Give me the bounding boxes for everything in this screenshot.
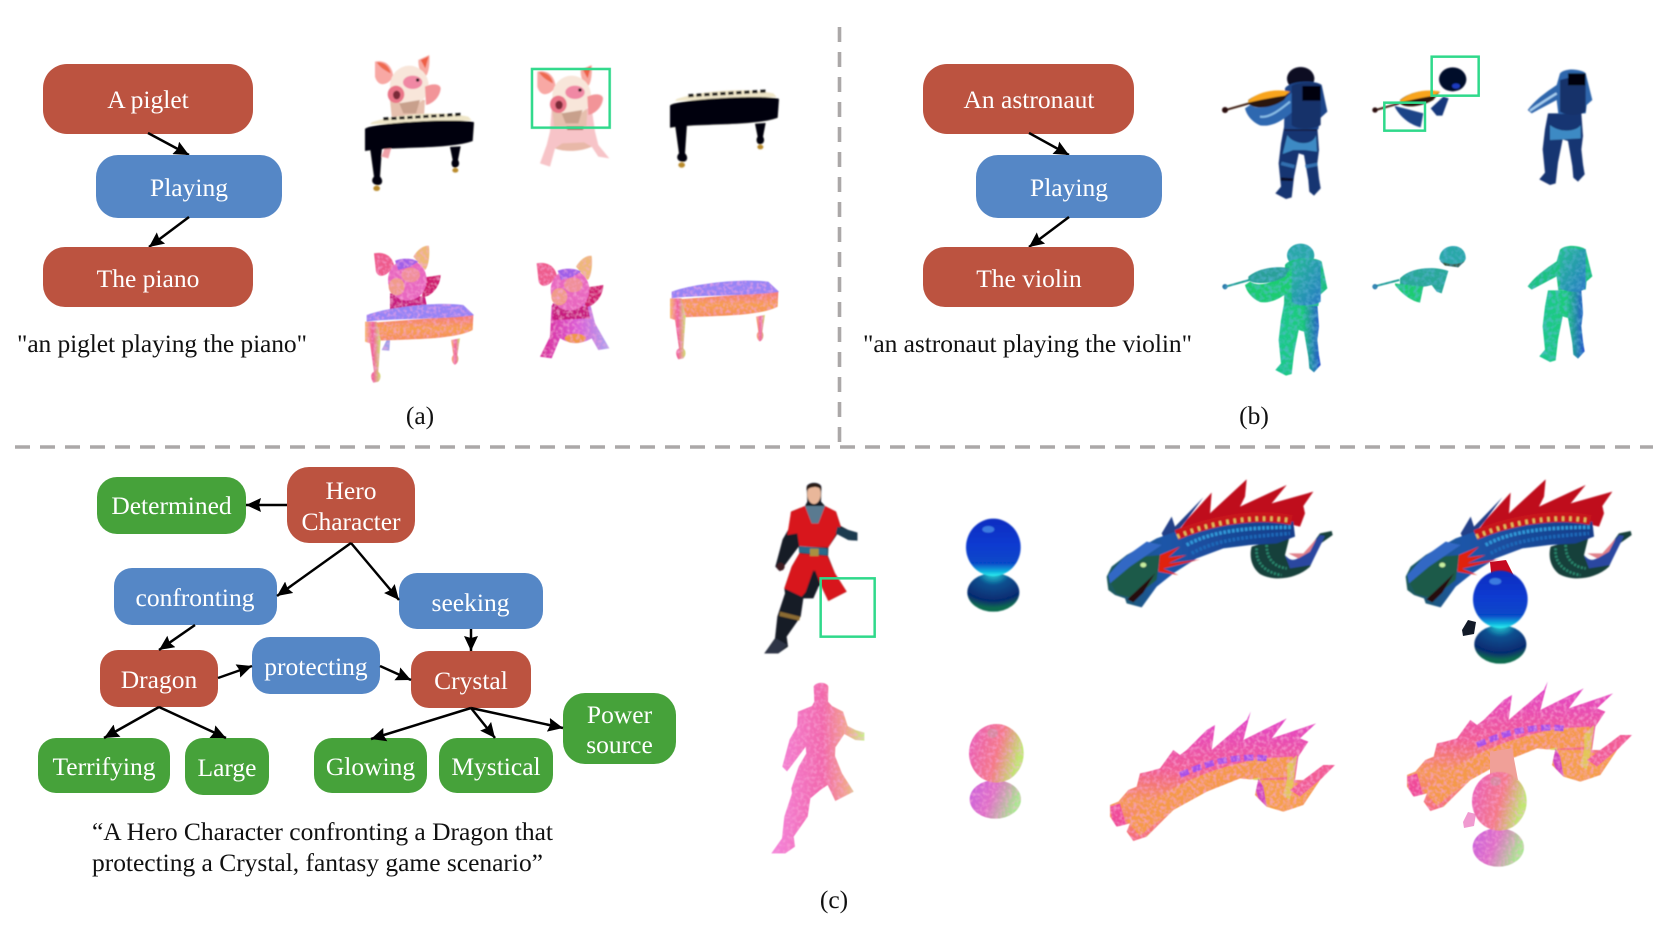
horizontal divider xyxy=(15,445,1653,449)
arrow: playing to piano xyxy=(149,217,189,247)
prompt text (c): protecting a Crystal, fantasy game scenario” xyxy=(92,848,543,877)
node: The piano xyxy=(43,247,253,307)
node: Power source: source xyxy=(586,730,653,759)
node: The violin xyxy=(923,247,1134,307)
node: An astronaut: An astronaut xyxy=(963,85,1095,114)
node: Large: Large xyxy=(198,753,256,782)
arrow: playing to violin xyxy=(1029,217,1069,247)
prompt text (c) xyxy=(92,817,553,877)
highlight box: hero coat xyxy=(821,578,875,637)
arrow: piglet to playing xyxy=(148,133,189,155)
highlight box: violin arm xyxy=(1384,103,1425,131)
node: Power source xyxy=(563,693,676,764)
node: Glowing xyxy=(314,738,427,793)
node: Hero Character: Hero xyxy=(326,476,376,505)
highlight box: helmet xyxy=(1432,57,1479,96)
node: confronting: confronting xyxy=(136,583,255,612)
caption (a): (a) xyxy=(406,401,434,430)
node: Playing xyxy=(96,155,282,218)
prompt text (a): "an piglet playing the piano" xyxy=(17,329,307,358)
render: crystal normal xyxy=(969,724,1024,819)
render: dragon normal xyxy=(1110,712,1335,841)
node: Determined xyxy=(97,477,246,534)
node: A piglet: A piglet xyxy=(107,85,189,114)
node: A piglet xyxy=(43,64,253,134)
render: combined dragon and crystal normal xyxy=(1407,682,1632,867)
render row: piglet and piano normals xyxy=(365,246,779,383)
render: dragon RGB xyxy=(1107,479,1333,607)
render: crystal RGB xyxy=(966,519,1021,612)
render: combined dragon and crystal RGB xyxy=(1406,479,1632,664)
render row: astronaut RGB xyxy=(1222,57,1592,199)
node: Glowing: Glowing xyxy=(326,752,415,781)
node: Terrifying: Terrifying xyxy=(52,752,156,781)
node: protecting xyxy=(252,637,380,694)
node: An astronaut xyxy=(923,64,1134,134)
panel (a): piglet scene xyxy=(17,55,779,430)
node: Crystal: Crystal xyxy=(434,666,508,695)
node: The violin: The violin xyxy=(976,264,1082,293)
node: Determined: Determined xyxy=(111,491,232,520)
node: confronting xyxy=(114,568,277,625)
node: Dragon: Dragon xyxy=(121,665,197,694)
panel (b): astronaut scene xyxy=(863,57,1592,430)
node: seeking: seeking xyxy=(432,588,510,617)
node: Terrifying xyxy=(38,738,170,793)
node: Power source: Power xyxy=(587,700,653,729)
node: Dragon xyxy=(100,650,218,707)
node: The piano: The piano xyxy=(97,264,199,293)
render row: astronaut normals xyxy=(1222,244,1592,376)
graph arrows xyxy=(104,505,563,739)
node: Large xyxy=(185,738,269,795)
caption (b): (b) xyxy=(1239,401,1269,430)
node: Playing: Playing xyxy=(1030,173,1108,202)
node: protecting: protecting xyxy=(264,652,368,681)
node: Hero Character xyxy=(287,467,415,543)
node: Playing xyxy=(976,155,1162,218)
prompt text (c): “A Hero Character confronting a Dragon that xyxy=(92,817,553,846)
node: Hero Character: Character xyxy=(301,507,401,536)
highlight box: piglet xyxy=(532,69,610,128)
node: seeking xyxy=(399,573,543,629)
render: hero normal xyxy=(771,683,864,853)
render row: piglet and piano RGB xyxy=(365,55,779,191)
panel (c): scene graph xyxy=(38,467,1632,914)
node: Mystical: Mystical xyxy=(451,752,541,781)
vertical divider xyxy=(838,27,841,442)
node: Playing: Playing xyxy=(150,173,228,202)
render: hero RGB xyxy=(764,483,875,653)
node: Crystal xyxy=(411,651,531,708)
node: Mystical xyxy=(439,738,553,793)
prompt text (b): "an astronaut playing the violin" xyxy=(863,329,1192,358)
caption (c): (c) xyxy=(820,885,848,914)
arrow: astronaut to playing xyxy=(1029,133,1069,155)
